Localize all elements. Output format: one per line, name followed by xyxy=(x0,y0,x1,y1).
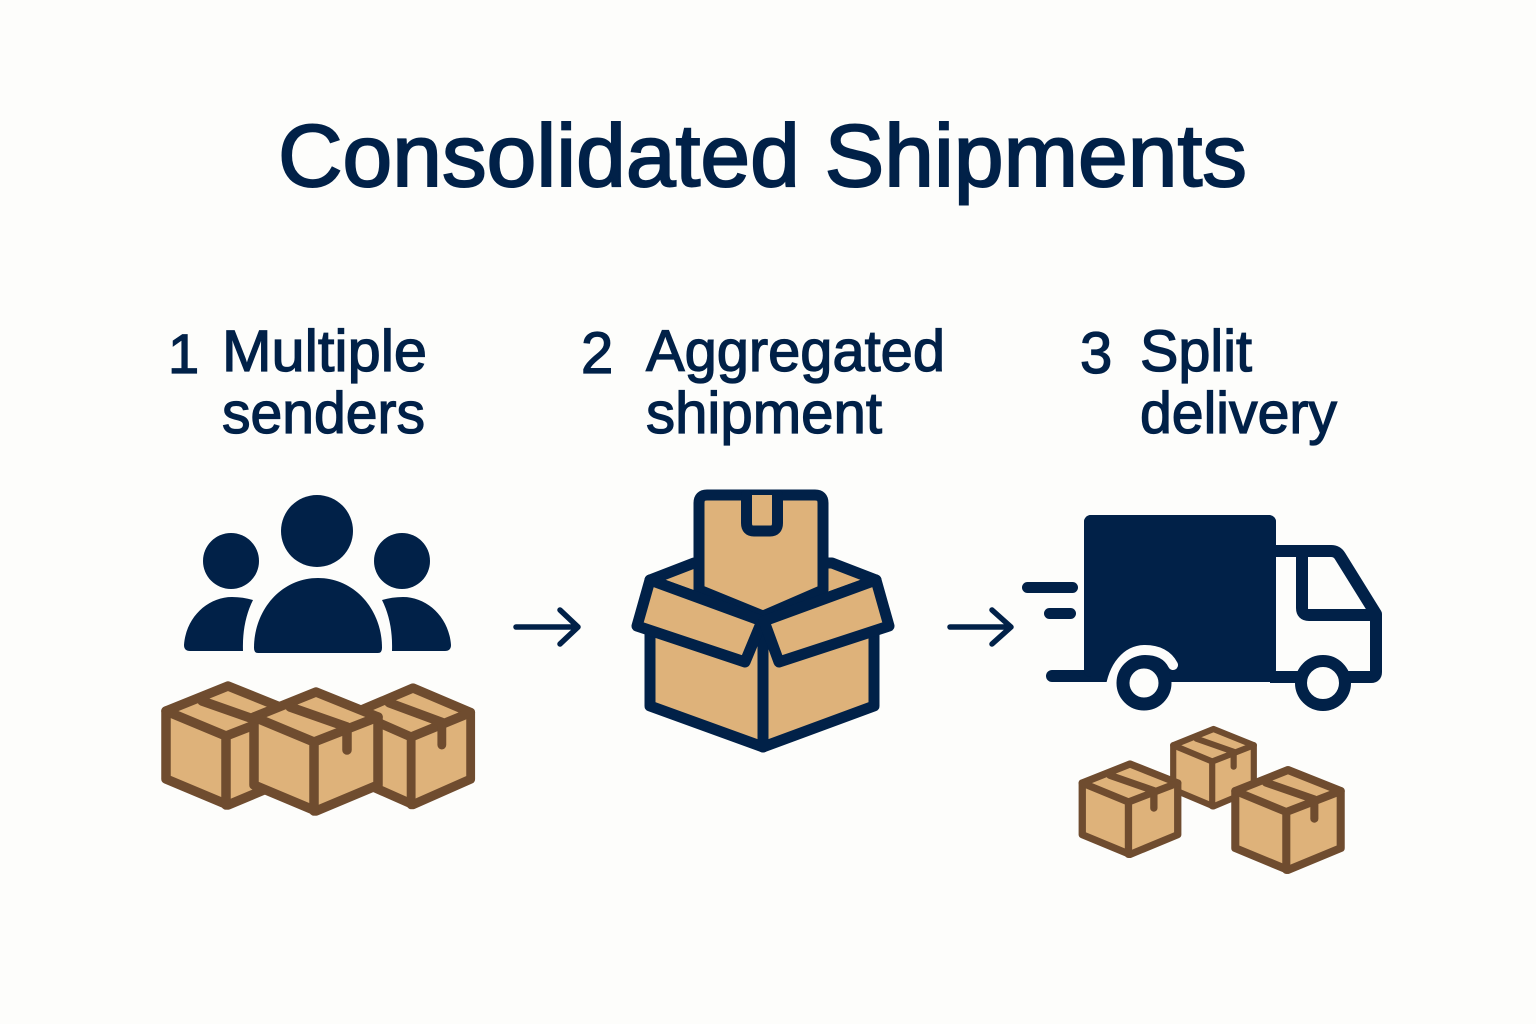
step 1 heading: Multiple xyxy=(222,319,427,384)
step 2 heading: shipment xyxy=(646,381,882,446)
icon: sender parcels xyxy=(166,686,471,811)
step 3 heading xyxy=(1080,319,1337,446)
icon: delivery truck xyxy=(1022,515,1376,705)
step 3 heading: delivery xyxy=(1140,381,1337,446)
step 2 heading: 2 xyxy=(581,321,613,386)
step 3 heading: Split xyxy=(1140,319,1252,384)
arrow: step 2 to step 3 xyxy=(950,610,1011,644)
icon: split parcels xyxy=(1082,729,1341,870)
step 1 heading: 1 xyxy=(168,322,199,385)
step 2 heading: Aggregated xyxy=(646,319,945,384)
arrow: step 1 to step 2 xyxy=(516,610,578,644)
step 3 heading: 3 xyxy=(1080,321,1112,386)
step 1 heading: senders xyxy=(222,381,425,446)
icon: group of senders xyxy=(184,495,451,653)
title: Consolidated Shipments xyxy=(278,106,1247,205)
icon: aggregated open box xyxy=(637,495,889,747)
step 1 heading xyxy=(168,319,427,446)
step 2 heading xyxy=(581,319,945,446)
